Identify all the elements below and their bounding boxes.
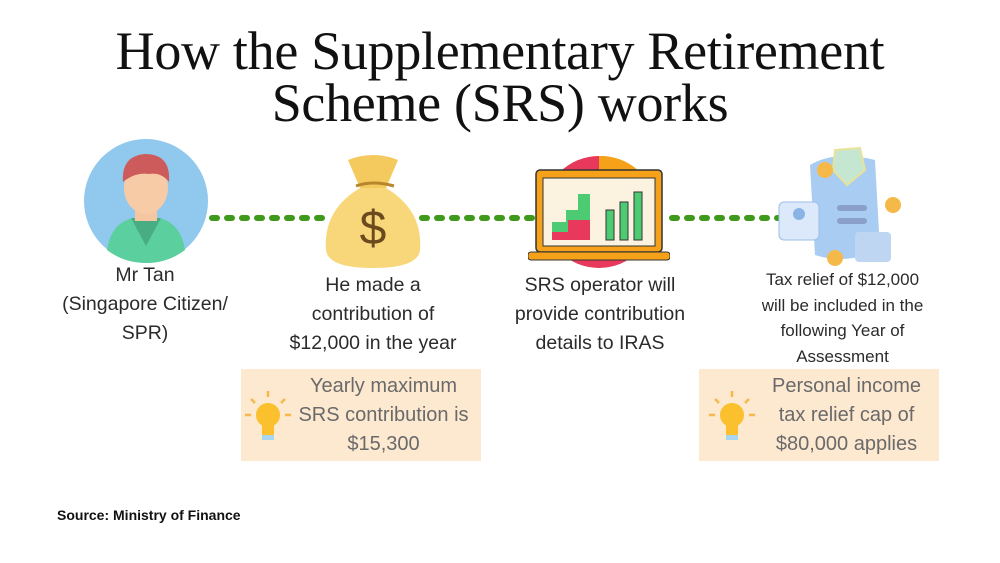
icon: light bulb [245, 391, 291, 440]
title [116, 21, 884, 133]
icon: laptop with charts [528, 156, 670, 268]
text: contribution: contribution of [312, 303, 434, 325]
callout: income tax cap [699, 369, 939, 461]
title: How the Supplementary Retirement [116, 21, 884, 81]
text: tax relief: following Year of [781, 321, 904, 340]
callout: yearly maximum: SRS contribution is [298, 404, 469, 426]
text: contribution: He made a [325, 274, 421, 296]
text: Mr Tan: SPR) [122, 322, 168, 344]
callout: income tax cap: $80,000 applies [776, 433, 917, 455]
text: contribution: $12,000 in the year [290, 332, 456, 354]
text: tax relief: Tax relief of $12,000 [766, 270, 919, 289]
icon: money bag [326, 155, 420, 268]
text: contribution [290, 274, 456, 354]
callout: income tax cap: Personal income [772, 375, 921, 397]
callout: yearly maximum: $15,300 [347, 433, 420, 455]
icon: person avatar [84, 139, 208, 263]
text: Mr Tan [62, 264, 228, 344]
text: tax relief: Assessment [796, 346, 889, 366]
icon: tax document [778, 146, 901, 266]
text: SRS operator: SRS operator will [525, 274, 675, 296]
callout: income tax cap: tax relief cap of [779, 404, 914, 426]
source: Source: Ministry of Finance [57, 507, 241, 523]
callout: yearly maximum: Yearly maximum [310, 375, 457, 397]
title: Scheme (SRS) works [272, 73, 728, 133]
text: SRS operator: details to IRAS [536, 332, 664, 354]
text: tax relief: will be included in the [762, 296, 923, 314]
callout: yearly maximum [241, 369, 481, 461]
text: SRS operator [515, 274, 685, 354]
text: Mr Tan: Mr Tan [115, 264, 175, 286]
icon: light bulb [709, 391, 755, 440]
text: Mr Tan: (Singapore Citizen/ [62, 293, 228, 315]
text: tax relief [762, 270, 923, 366]
icon: money bag: $ [360, 202, 386, 255]
text: SRS operator: provide contribution [515, 303, 685, 325]
